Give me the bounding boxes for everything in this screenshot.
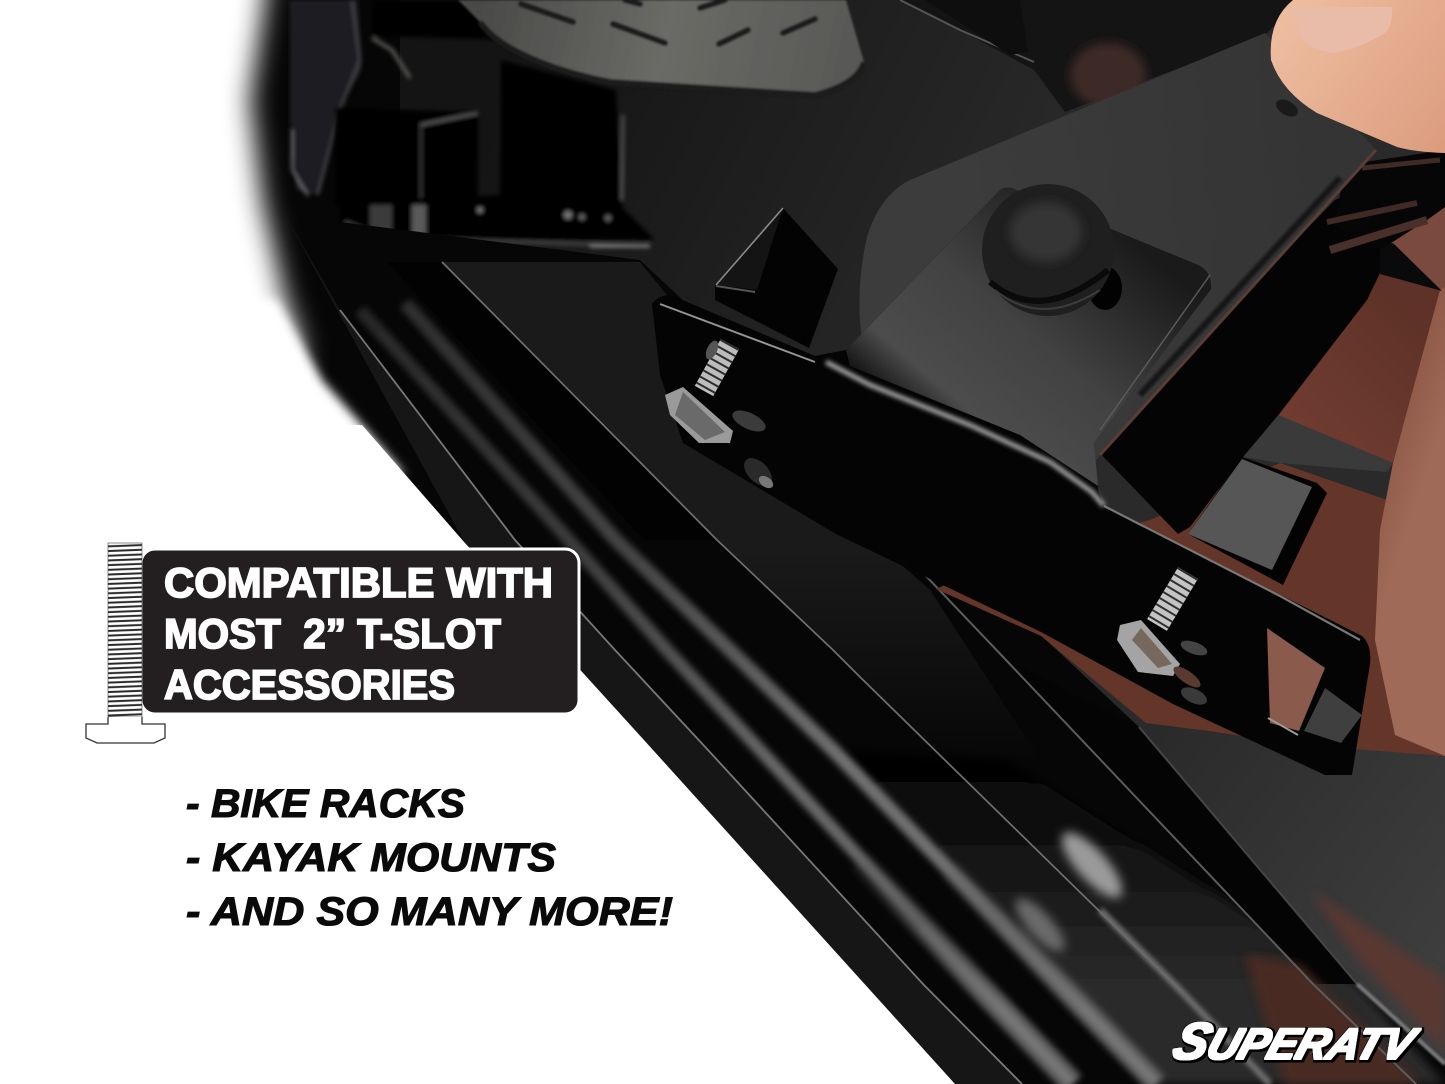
photo: rear black T-nut block: [715, 208, 838, 348]
right finger: [1375, 285, 1445, 756]
gray gap between fingers: [1243, 415, 1393, 472]
rail upper flat: [442, 262, 1040, 760]
photo: upper mounting plate: [859, 33, 1376, 462]
white diagonal panel with soft upper edge: [0, 0, 955, 1084]
photo: thumb and fingernail: [1271, 0, 1445, 153]
banner heading text: [164, 559, 553, 708]
bullet list of accessories: - KAYAK MOUNTS: [186, 836, 556, 880]
rail lower glow surface: [833, 750, 1445, 1084]
banner heading text: COMPATIBLE WITH: [164, 559, 553, 606]
rail highlight bands: [360, 303, 1157, 1084]
photo: aluminium T-slot rail channels: [285, 215, 1445, 1084]
photo: rubber button fastener: [982, 184, 1122, 316]
bracket window showing skin: [1267, 628, 1325, 731]
lower hand behind bracket: [936, 463, 1445, 756]
bracket fold highlight: [826, 362, 1104, 506]
photo: ribbed black strap: [1327, 150, 1445, 250]
icon: T-bolt: [86, 543, 165, 743]
rail brown skin reflection: [1245, 955, 1420, 1084]
photo: blurred black T-slot block and pedal shaft: [335, 60, 655, 246]
photo: hand fingers behind bracket: [936, 207, 1445, 756]
rail outer flange: [285, 215, 1022, 1084]
bullet list of accessories: [186, 782, 673, 934]
bullet list of accessories: - AND SO MANY MORE!: [186, 890, 673, 934]
photo backdrop: dark floor behind bracket: [400, 0, 1445, 730]
bullet list of accessories: - BIKE RACKS: [186, 782, 465, 826]
photo: front black T-nut block: [1188, 457, 1327, 585]
callout banner: T-slot compatibility: [141, 549, 579, 714]
photo: black mass under plate: [1094, 180, 1380, 534]
banner heading text: MOST 2” T-SLOT: [164, 610, 501, 657]
banner background: [141, 549, 579, 714]
photo: grey perforated pedal plate: [458, 0, 864, 95]
logo: SuperATV: SUPERATV: [1166, 1013, 1427, 1071]
photo: black L-bracket: [652, 188, 1370, 775]
photo: right T-bolt with slots: [1117, 573, 1210, 708]
dark wedge above middle finger: [1378, 243, 1442, 291]
rail thin lines: [340, 262, 1445, 1084]
top-right finger: [1380, 207, 1445, 290]
banner heading text: ACCESSORIES: [164, 661, 455, 708]
bracket upper tab: [846, 188, 1211, 486]
rail highlight spots: [1008, 824, 1131, 958]
bracket window showing shiny block: [1304, 688, 1362, 743]
photo: left T-bolt with slots: [665, 339, 777, 491]
rail black gap between thin lines: [1006, 660, 1357, 984]
photo: blurred left upright bracket: [290, 0, 510, 196]
middle finger: [1278, 273, 1440, 463]
rail dark groove: [387, 262, 717, 540]
photo: grey floor lower right: [1100, 690, 1445, 1064]
photo: dark clothing top right: [900, 0, 1300, 112]
